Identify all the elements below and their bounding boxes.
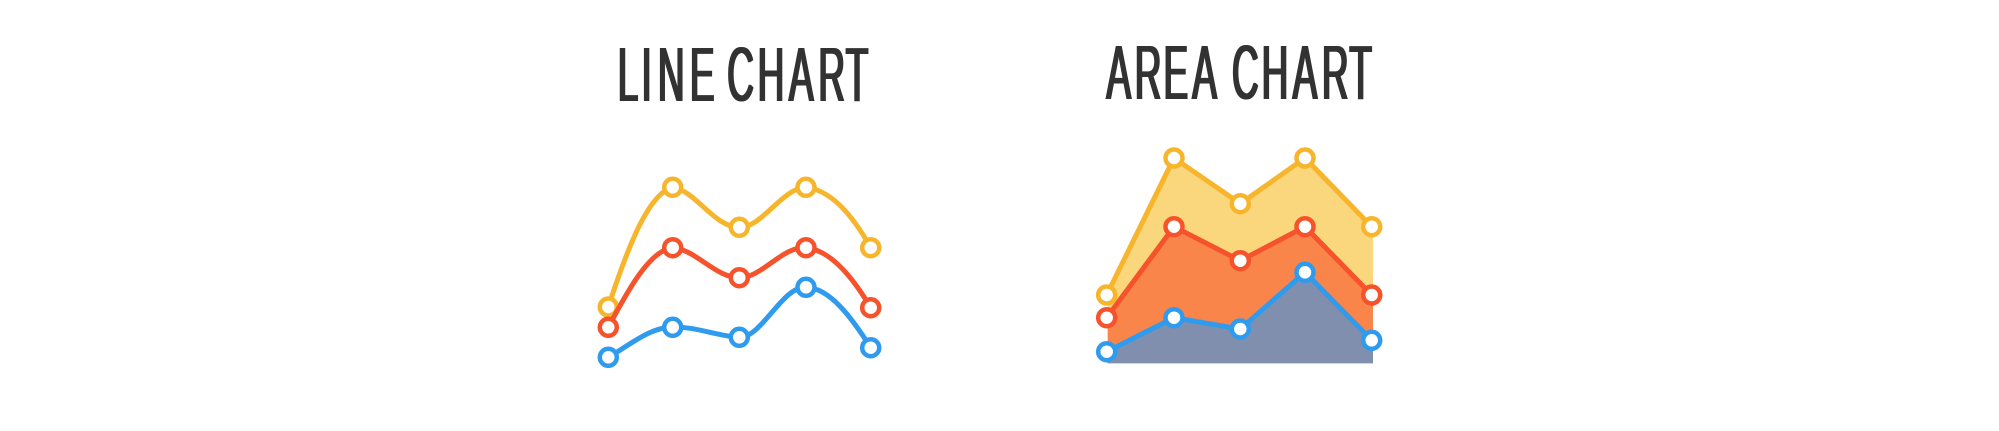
yellow area markers — [1098, 150, 1380, 304]
red area series — [1107, 227, 1373, 363]
blue line series — [600, 279, 879, 366]
blue area series — [1107, 272, 1373, 363]
red line series — [600, 239, 879, 336]
title: line chart: LINE CHART — [618, 31, 868, 118]
yellow area series — [1107, 158, 1373, 363]
title: area chart: AREA CHART — [1106, 29, 1372, 116]
blue area markers — [1098, 264, 1380, 360]
area chart — [1098, 150, 1380, 363]
line chart — [600, 179, 879, 366]
yellow line series — [600, 179, 879, 316]
red area markers — [1098, 218, 1380, 326]
